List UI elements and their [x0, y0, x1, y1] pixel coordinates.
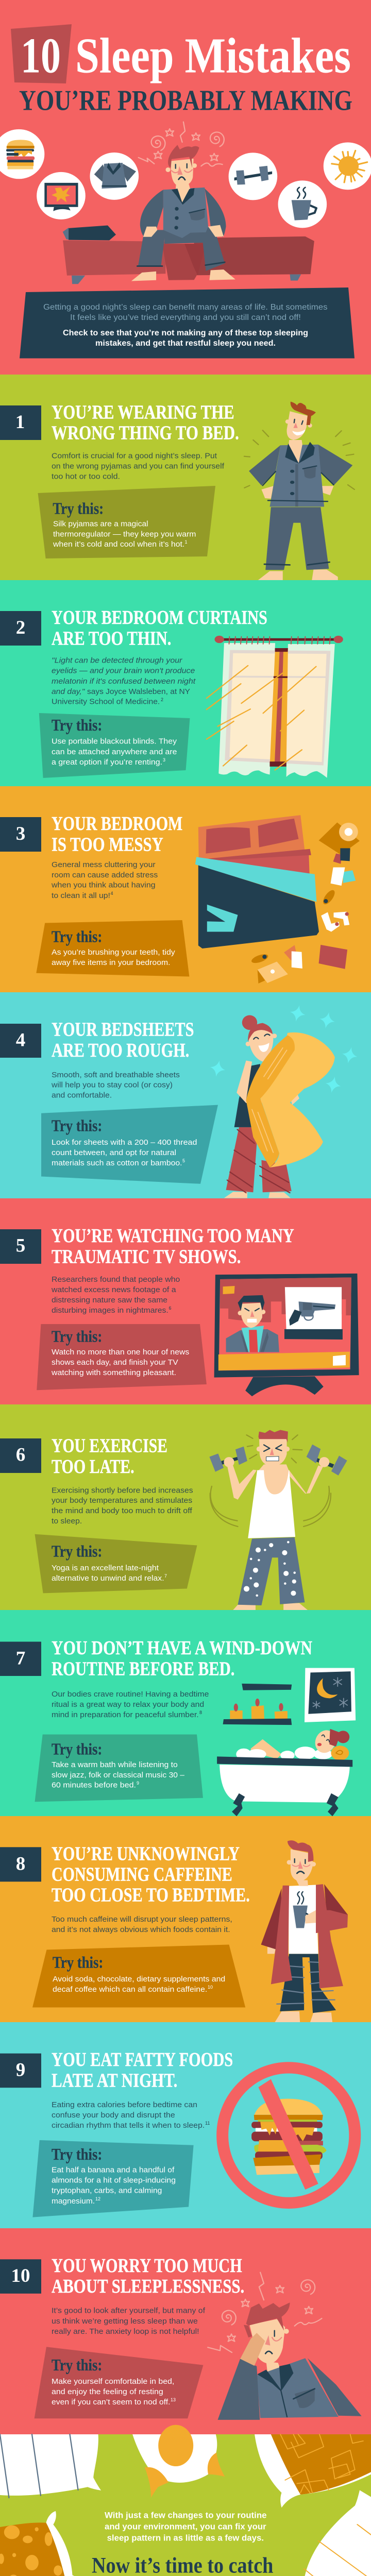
- heading: TRAUMATIC TV SHOWS.: [52, 1246, 241, 1267]
- body text: and it’s not always obvious which foods contain it.: [52, 1925, 230, 1934]
- try this panel: Try this:: [52, 1739, 102, 1758]
- number badge 7: [0, 1641, 41, 1676]
- no burger sign: [223, 2067, 355, 2203]
- number badge 2: [0, 611, 41, 646]
- try this panel: Try this:: [53, 1953, 103, 1972]
- heading: YOUR BEDSHEETS: [52, 1019, 194, 1041]
- body text: 2: [161, 697, 163, 702]
- body text: [52, 1690, 209, 1719]
- body text: 8: [199, 1710, 202, 1715]
- body text: really are. The anxiety loop is not helpful!: [52, 2327, 199, 2336]
- body text: melatonin if it's confused between night: [52, 677, 196, 686]
- heading: YOUR BEDROOM: [52, 813, 182, 835]
- body text: [51, 1071, 180, 1099]
- body text: the mind and body too much to drift off: [52, 1506, 193, 1515]
- try this panel: Try this:: [52, 1327, 102, 1345]
- body text: It’s good to look after yourself, but many of: [52, 2307, 206, 2315]
- try this panel: tryptophan, carbs, and calming: [52, 2187, 162, 2195]
- body text: 4: [110, 891, 113, 896]
- heading: [52, 2049, 233, 2091]
- try this panel: a great option if you’re renting.: [52, 758, 162, 767]
- body text: will help you to stay cool (or cosy): [51, 1081, 173, 1090]
- try this panel: when it’s cold and cool when it’s hot.: [53, 540, 184, 549]
- body text: watched excess news footage of a: [51, 1285, 176, 1294]
- try this panel: Look for sheets with a 200 – 400 thread: [52, 1138, 197, 1147]
- panel: mistake 8: [0, 1816, 371, 2023]
- try this panel: thermoregulator — they keep you warm: [53, 530, 196, 539]
- panel: mistake 9: [0, 2022, 371, 2228]
- closing message: and your environment, you can fix your: [105, 2522, 266, 2531]
- try this panel: 12: [95, 2196, 100, 2201]
- body text: [52, 2100, 210, 2130]
- try this panel: count between, and opt for natural: [52, 1148, 176, 1157]
- body text: your body temperatures and stimulates: [52, 1496, 192, 1505]
- try this panel: Yoga is an excellent late-night: [52, 1564, 159, 1572]
- try this panel: As you’re brushing your teeth, tidy: [52, 948, 175, 957]
- icon: coffee cup: [278, 180, 327, 228]
- body text: Too much caffeine will disrupt your sleep patterns,: [52, 1915, 232, 1924]
- heading: CONSUMING CAFFEINE: [52, 1863, 232, 1885]
- number badge 3: 3: [16, 823, 25, 844]
- title badge: [11, 24, 72, 83]
- icon: tv: [37, 172, 86, 219]
- body text: Researchers found that people who: [52, 1275, 180, 1284]
- heading: YOU’RE WEARING THE: [52, 402, 234, 423]
- panel: mistake 5: [0, 1198, 371, 1404]
- body text: Comfort is crucial for a good night’s sleep. Put: [52, 451, 217, 460]
- number badge 6: 6: [16, 1445, 25, 1466]
- body text: General mess cluttering your: [52, 860, 156, 869]
- number badge 8: [0, 1847, 41, 1882]
- heading: TOO LATE.: [52, 1456, 134, 1478]
- try this panel: 60 minutes before bed.: [52, 1781, 136, 1790]
- try this panel: Use portable blackout blinds. They: [52, 737, 177, 746]
- heading: [52, 1637, 312, 1680]
- body text: [52, 656, 196, 706]
- heading: ARE TOO THIN.: [52, 628, 171, 649]
- try this panel: watching with something pleasant.: [51, 1368, 176, 1377]
- try this panel: Avoid soda, chocolate, dietary supplements and: [53, 1975, 225, 1984]
- heading: [52, 1225, 294, 1267]
- heading: YOUR BEDROOM CURTAINS: [52, 607, 267, 629]
- number badge 2: 2: [16, 617, 25, 638]
- doodles: headache: [139, 122, 224, 166]
- icon: burger: [0, 129, 44, 179]
- body text: ritual is a great way to relax your body and: [52, 1700, 204, 1709]
- panel: mistake 10: [0, 2228, 371, 2434]
- heading: ARE TOO ROUGH.: [52, 1040, 189, 1061]
- body text: Our bodies crave routine! Having a bedtime: [52, 1690, 209, 1699]
- intro panel: Check to see that you’re not making any of these top sleeping: [63, 329, 308, 337]
- try this panel: 7: [164, 1573, 167, 1579]
- panel: mistake 4: [0, 992, 371, 1198]
- try this panel: Watch no more than one hour of news: [52, 1348, 189, 1357]
- body text: Eating extra calories before bedtime can: [52, 2100, 197, 2109]
- try this panel: [39, 713, 190, 778]
- try this panel: shows each day, and finish your TV: [52, 1358, 178, 1367]
- panel: mistake 3: [0, 786, 371, 992]
- body text: to clean it all up!: [52, 891, 110, 900]
- try this panel: [35, 1534, 197, 1593]
- try this panel: [37, 1324, 207, 1390]
- curtains and window: [207, 636, 343, 778]
- try this panel: Silk pyjamas are a magical: [53, 519, 148, 528]
- try this panel: 3: [163, 757, 165, 762]
- title: [19, 28, 352, 116]
- number badge 10: 10: [11, 2265, 30, 2286]
- number badge 4: 4: [16, 1029, 25, 1050]
- body text: when you think about having: [51, 881, 156, 890]
- body text: and comfortable.: [52, 1091, 112, 1099]
- heading: YOU WORRY TOO MUCH: [52, 2255, 242, 2277]
- number badge 4: [0, 1024, 41, 1058]
- heading: [52, 1019, 194, 1061]
- heading: [52, 1435, 167, 1478]
- body text: circadian rhythm that tells it when to sleep.: [52, 2121, 205, 2130]
- try this panel: Try this:: [52, 1541, 102, 1560]
- number badge 9: 9: [16, 2059, 25, 2080]
- title: 10: [21, 28, 61, 84]
- intro panel: mistakes, and get that restful sleep you need.: [95, 339, 276, 348]
- body text: distressing nature saw the same: [52, 1296, 167, 1304]
- panel: mistake 7: [0, 1610, 371, 1816]
- body text: and day,": [52, 687, 85, 696]
- body text: confuse your body and disrupt the: [52, 2111, 175, 2120]
- number badge 5: [0, 1229, 41, 1264]
- heading: YOU EXERCISE: [52, 1435, 167, 1457]
- body text: [52, 2307, 206, 2336]
- body text: [51, 860, 158, 900]
- number badge 9: [0, 2054, 41, 2088]
- try this panel: Try this:: [52, 2355, 102, 2374]
- try this panel: and enjoy the feeling of resting: [52, 2387, 163, 2396]
- try this panel: 9: [137, 1781, 139, 1786]
- try this panel: even if you can’t seem to nod off.: [52, 2398, 170, 2406]
- closing message: sleep pattern in as little as a few days.: [107, 2534, 264, 2543]
- number badge 10: [0, 2259, 41, 2294]
- body text: disturbing images in nightmares.: [52, 1306, 168, 1315]
- pillows lower: [0, 2490, 371, 2576]
- try this panel: Try this:: [52, 1116, 102, 1134]
- icon: pyjama shirt: [90, 152, 139, 200]
- try this panel: [32, 2140, 194, 2217]
- man lifting dumbbells: [209, 1430, 347, 1610]
- worried man: [208, 2273, 362, 2420]
- try this panel: 1: [184, 539, 188, 545]
- try this panel: 13: [171, 2397, 176, 2402]
- number badge 3: [0, 817, 41, 852]
- body text: [52, 451, 225, 481]
- heading: ROUTINE BEFORE BED.: [52, 1658, 234, 1680]
- bed: [63, 225, 314, 284]
- heading: YOU’RE WATCHING TOO MANY: [52, 1225, 294, 1247]
- try this panel: 5: [182, 1158, 185, 1163]
- number badge 7: 7: [16, 1648, 25, 1669]
- try this panel: [36, 920, 189, 977]
- man in pyjamas: [244, 401, 355, 580]
- try this panel: away five items in your bedroom.: [52, 958, 170, 967]
- try this panel: materials such as cotton or bamboo.: [52, 1159, 182, 1167]
- try this panel: [41, 1105, 218, 1184]
- messy bed illustration: [195, 815, 360, 984]
- try this panel: [32, 1944, 245, 2007]
- body text: too hot or too cold.: [52, 472, 120, 481]
- try this panel: Make yourself comfortable in bed,: [52, 2377, 174, 2386]
- heading: LATE AT NIGHT.: [52, 2070, 177, 2091]
- number badge 8: 8: [16, 1854, 25, 1874]
- bath illustration: [217, 1668, 356, 1816]
- icon: dumbbell: [229, 152, 277, 200]
- try this panel: [35, 1734, 203, 1802]
- try this panel: Try this:: [52, 927, 102, 946]
- try this panel: 10: [208, 1985, 213, 1990]
- body text: 11: [205, 2121, 210, 2126]
- panel: hero: [0, 0, 371, 375]
- body text: 6: [169, 1306, 172, 1311]
- try this panel: [38, 486, 215, 558]
- try this panel: Try this:: [52, 716, 102, 734]
- heading: [52, 1843, 250, 1906]
- try this panel: Try this:: [52, 2145, 102, 2163]
- intro panel: Getting a good night’s sleep can benefit many areas of life. But sometimes: [43, 303, 328, 312]
- body text: on the wrong pyjamas and you can find yourself: [52, 462, 225, 470]
- body text: "Light can be detected through your: [52, 656, 183, 665]
- pillows top row: [0, 2425, 371, 2507]
- number badge 1: 1: [15, 412, 25, 433]
- try this panel: almonds for a hit of sleep-inducing: [52, 2176, 176, 2185]
- body text: room can cause added stress: [52, 871, 158, 879]
- try this panel: [35, 2347, 203, 2418]
- heading: IS TOO MESSY: [52, 834, 163, 855]
- body text: mind in preparation for peaceful slumber.: [52, 1710, 199, 1719]
- try this panel: Take a warm bath while listening to: [52, 1760, 178, 1769]
- heading: TOO CLOSE TO BEDTIME.: [52, 1885, 250, 1906]
- intro panel: [20, 287, 355, 359]
- body text: to sleep.: [52, 1517, 82, 1526]
- try this panel: Try this:: [53, 499, 104, 517]
- body text: [52, 1486, 193, 1526]
- tv news illustration: [214, 1274, 359, 1396]
- body text: us think we’re getting less sleep than we: [52, 2317, 198, 2326]
- heading: [52, 402, 239, 444]
- number badge 6: [0, 1438, 41, 1473]
- body text: says Joyce Walsleben, at NY: [87, 687, 190, 696]
- body text: Smooth, soft and breathable sheets: [52, 1071, 180, 1079]
- try this panel: can be attached anywhere and are: [52, 748, 177, 756]
- panel: mistake 2: [0, 580, 371, 786]
- try this panel: decaf coffee which can all contain caffeine.: [53, 1985, 207, 1994]
- try this panel: Eat half a banana and a handful of: [52, 2166, 175, 2174]
- body text: [52, 1915, 232, 1934]
- heading: ABOUT SLEEPLESSNESS.: [52, 2276, 244, 2297]
- heading: [52, 607, 267, 649]
- closing message: With just a few changes to your routine: [105, 2511, 267, 2520]
- man with coffee: [261, 1840, 348, 2023]
- hero illustration: [0, 122, 371, 284]
- icon: sun: [324, 142, 371, 190]
- body text: [51, 1275, 180, 1315]
- heading: WRONG THING TO BED.: [52, 422, 239, 444]
- panel: mistake 6: [0, 1404, 371, 1610]
- woman hugging pillow: [208, 1004, 359, 1198]
- intro panel: It feels like you’ve tried everything and you still can’t nod off!: [70, 313, 301, 322]
- heading: YOU DON’T HAVE A WIND-DOWN: [52, 1637, 312, 1659]
- body text: eyelids — and your brain won't produce: [52, 667, 195, 675]
- try this panel: slow jazz, folk or classical music 30 –: [52, 1771, 185, 1780]
- try this panel: magnesium.: [52, 2197, 95, 2206]
- closing message: [105, 2511, 267, 2543]
- heading: YOU’RE UNKNOWINGLY: [52, 1843, 240, 1865]
- body text: University School of Medicine.: [52, 698, 160, 706]
- heading: [52, 813, 182, 855]
- panel: closing: [0, 2425, 371, 2576]
- try this panel: alternative to unwind and relax.: [52, 1574, 164, 1583]
- number badge 1: [0, 405, 41, 440]
- body text: Exercising shortly before bed increases: [52, 1486, 193, 1495]
- heading: YOU EAT FATTY FOODS: [52, 2049, 233, 2071]
- man sitting on bed: [131, 145, 235, 281]
- panel: mistake 1: [0, 375, 371, 580]
- heading: [52, 2255, 244, 2297]
- number badge 5: 5: [16, 1235, 25, 1256]
